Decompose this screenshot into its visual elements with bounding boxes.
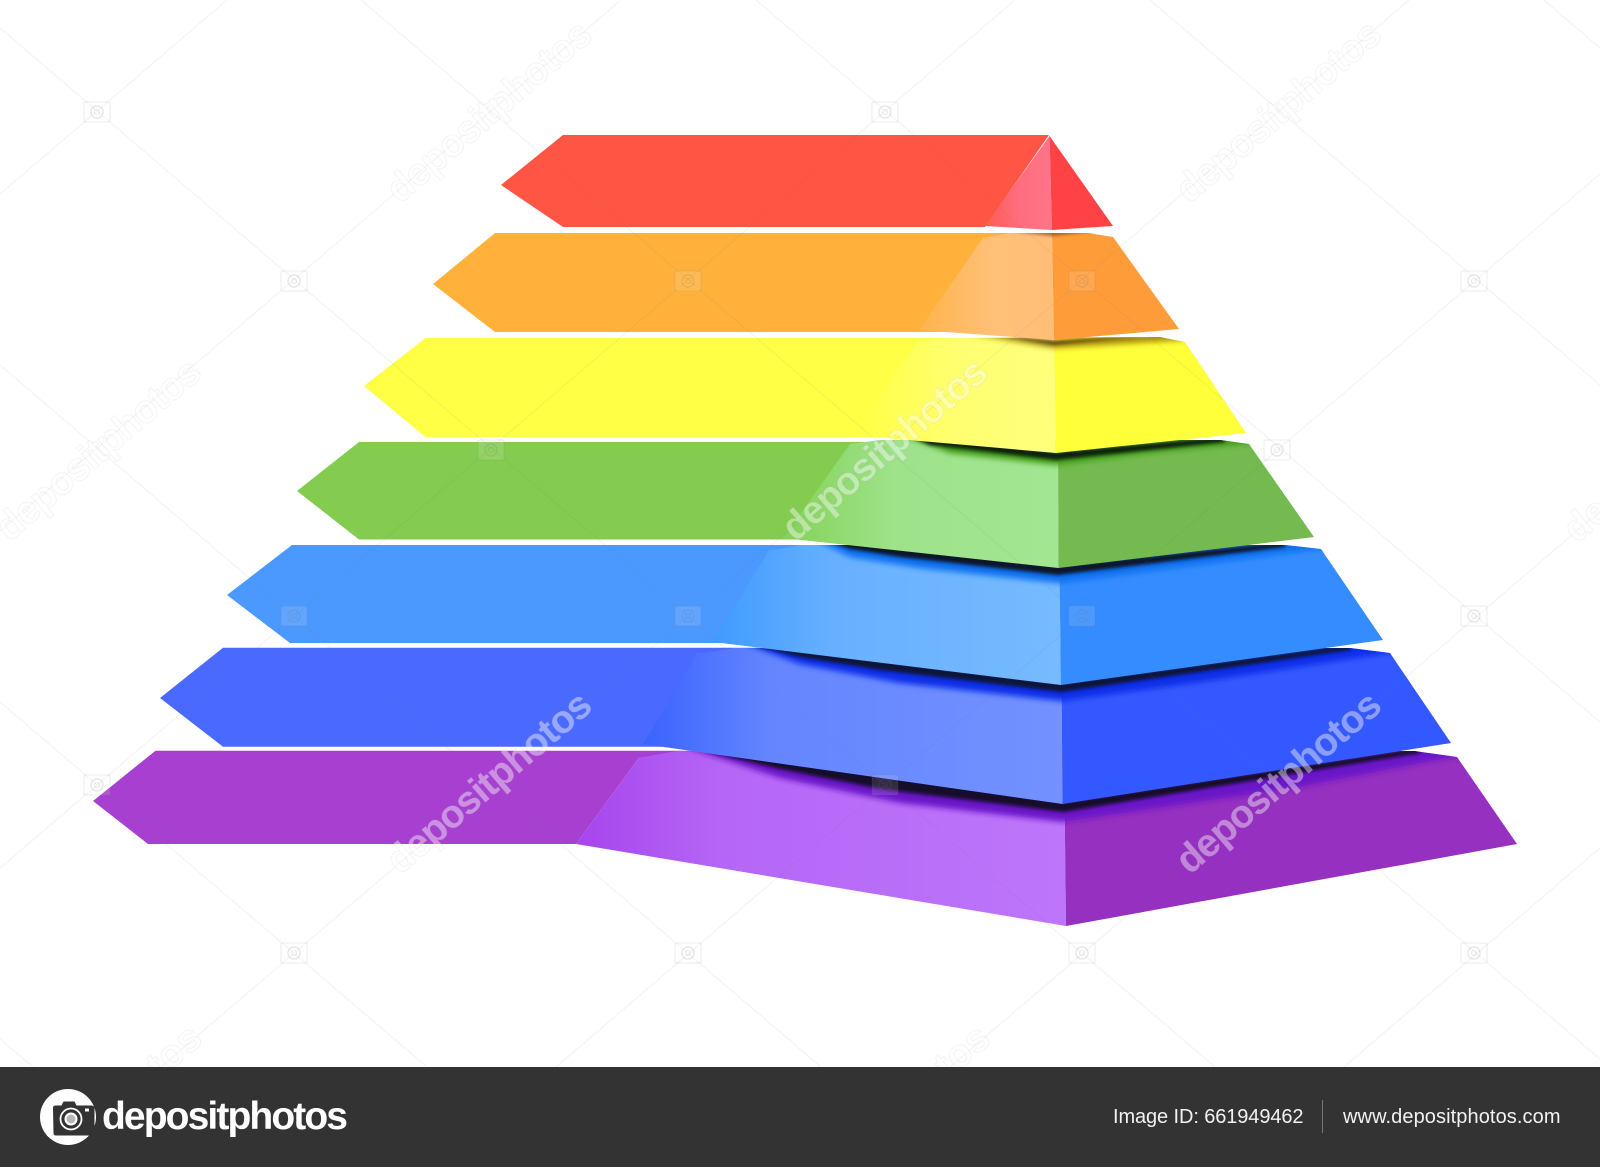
purple arrow bar — [93, 751, 700, 844]
yellow right face — [1054, 337, 1246, 453]
pyramid layer: yellow — [364, 328, 1246, 453]
green right face — [1058, 440, 1314, 568]
green left face — [783, 440, 1058, 568]
shadow on purple — [670, 741, 1462, 822]
orange right face — [1052, 233, 1179, 340]
indigo right face — [1061, 648, 1451, 804]
image id: Image ID: 661949462 — [1113, 1106, 1304, 1128]
orange left face — [919, 233, 1054, 340]
purple right face — [1064, 751, 1517, 926]
shadow on blue — [818, 545, 1322, 587]
yellow left face — [853, 338, 1056, 453]
yellow arrow bar — [364, 338, 965, 437]
orange arrow bar — [433, 233, 1030, 332]
red left face — [985, 136, 1052, 230]
purple left face — [576, 751, 1066, 926]
website url: www.depositphotos.com — [1342, 1106, 1560, 1128]
watermark text: depositphotos — [773, 350, 996, 549]
shadow on green — [905, 440, 1251, 469]
pyramid layer: blue — [227, 532, 1383, 685]
watermark text: tos — [138, 1016, 210, 1087]
shadow on yellow — [971, 337, 1185, 352]
blue right face — [1059, 545, 1383, 685]
pyramid layer: green — [297, 431, 1314, 568]
logo wordmark: depositphotos — [102, 1095, 348, 1138]
shadow on indigo — [747, 648, 1392, 705]
red right face — [1050, 136, 1113, 230]
blue arrow bar — [227, 545, 820, 643]
blue left face — [713, 545, 1061, 685]
pyramid layer: indigo — [160, 638, 1451, 804]
watermark text: tos — [926, 1016, 998, 1087]
watermark text: depositphotos — [1167, 683, 1390, 882]
red arrow bar — [501, 135, 1049, 227]
watermark text: depositphotos — [378, 683, 600, 882]
green arrow bar — [297, 442, 890, 540]
icon: logo camera — [40, 1089, 96, 1145]
watermark text: depositphotos — [1167, 12, 1390, 211]
indigo arrow bar — [160, 648, 760, 747]
shadow on orange — [1014, 233, 1097, 238]
watermark text: depositphotos — [378, 12, 600, 211]
pyramid layer: purple — [93, 741, 1517, 926]
watermark camera icons — [84, 102, 1487, 963]
footer band — [0, 1067, 1600, 1167]
pyramid layer: orange — [433, 229, 1179, 340]
pyramid layer: red — [501, 135, 1113, 230]
indigo left face — [643, 648, 1063, 804]
